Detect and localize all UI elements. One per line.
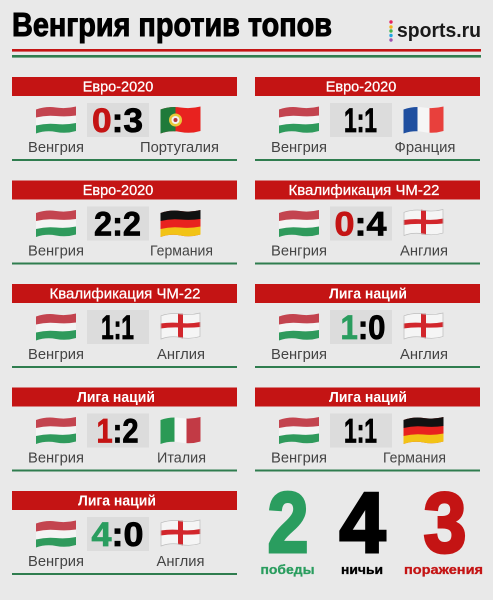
match: Венгрия 1:1 Англия: Англия — [157, 346, 205, 363]
score: 1:0 — [340, 309, 386, 347]
match: Венгрия 2:2 Германия: Венгрия — [28, 242, 84, 260]
match: Венгрия 1:2 Италия: Лига наций — [77, 390, 155, 406]
stat: 3 losses: поражения — [404, 562, 483, 577]
score: 1:1 — [344, 102, 377, 140]
match: Венгрия 1:1 Франция: Венгрия — [271, 139, 327, 156]
match: Венгрия 1:1 Франция: Франция — [394, 139, 456, 156]
match: Венгрия 2:2 Германия: Евро-2020 — [83, 183, 153, 199]
match: Венгрия 0:4 Англия: Англия — [400, 242, 448, 260]
match: Венгрия 0:4 Англия: Венгрия — [271, 242, 327, 260]
stat: 4 draws: ничьи — [341, 562, 383, 577]
match: Венгрия 4:0 Англия: Венгрия — [28, 553, 84, 570]
match: Венгрия 4:0 Англия — [12, 491, 237, 575]
match: Венгрия 1:0 Англия: Англия — [400, 346, 448, 363]
score: 4:0 — [92, 516, 144, 554]
match: Венгрия 0:3 Португалия: Венгрия — [28, 139, 84, 156]
stat: 3 losses: 3 — [424, 476, 466, 571]
score: 1:1 — [101, 309, 134, 347]
match: Венгрия 1:1 Германия: Венгрия — [271, 450, 327, 466]
match: Венгрия 0:4 Англия — [255, 180, 480, 264]
logo: sports.ru: sports.ru — [397, 20, 481, 42]
match: Венгрия 1:1 Англия — [12, 284, 237, 368]
match: Венгрия 0:3 Португалия: Португалия — [140, 139, 219, 156]
score: 0:4 — [334, 206, 387, 244]
match: Венгрия 1:1 Англия: Венгрия — [28, 346, 84, 363]
title: Венгрия против топов — [12, 6, 332, 43]
match: Венгрия 1:0 Англия: Лига наций — [329, 286, 407, 302]
match: Венгрия 4:0 Англия: Лига наций — [78, 494, 156, 510]
match: Венгрия 1:1 Франция: Евро-2020 — [326, 80, 396, 96]
stat: 3 losses — [404, 476, 483, 577]
match: Венгрия 2:2 Германия: Германия — [150, 242, 213, 260]
score: 1:1 — [344, 412, 377, 450]
stat: 2 wins: победы — [260, 562, 314, 577]
match: Венгрия 1:1 Германия: Лига наций — [329, 390, 407, 406]
match: Венгрия 1:2 Италия: Венгрия — [28, 450, 84, 466]
match: Венгрия 0:4 Англия: Квалификация ЧМ-22 — [288, 183, 440, 199]
match: Венгрия 1:0 Англия: Венгрия — [271, 346, 327, 363]
match: Венгрия 1:1 Германия — [255, 388, 480, 472]
stat: 4 draws: 4 — [340, 476, 386, 571]
match: Венгрия 0:3 Португалия: Евро-2020 — [83, 80, 153, 96]
match: Венгрия 0:3 Португалия — [12, 77, 237, 161]
match: Венгрия 2:2 Германия — [12, 180, 237, 264]
match: Венгрия 4:0 Англия: Англия — [156, 553, 204, 570]
score: 2:2 — [94, 206, 141, 244]
match: Венгрия 1:2 Италия — [12, 388, 237, 472]
stat: 2 wins: 2 — [268, 476, 308, 571]
match: Венгрия 1:1 Франция — [255, 77, 480, 161]
match: Венгрия 1:1 Англия: Квалификация ЧМ-22 — [50, 286, 200, 302]
match: Венгрия 1:0 Англия — [255, 284, 480, 368]
score: 1:2 — [96, 412, 138, 450]
score: 0:3 — [92, 102, 143, 140]
match: Венгрия 1:1 Германия: Германия — [383, 450, 446, 466]
match: Венгрия 1:2 Италия: Италия — [157, 450, 206, 466]
